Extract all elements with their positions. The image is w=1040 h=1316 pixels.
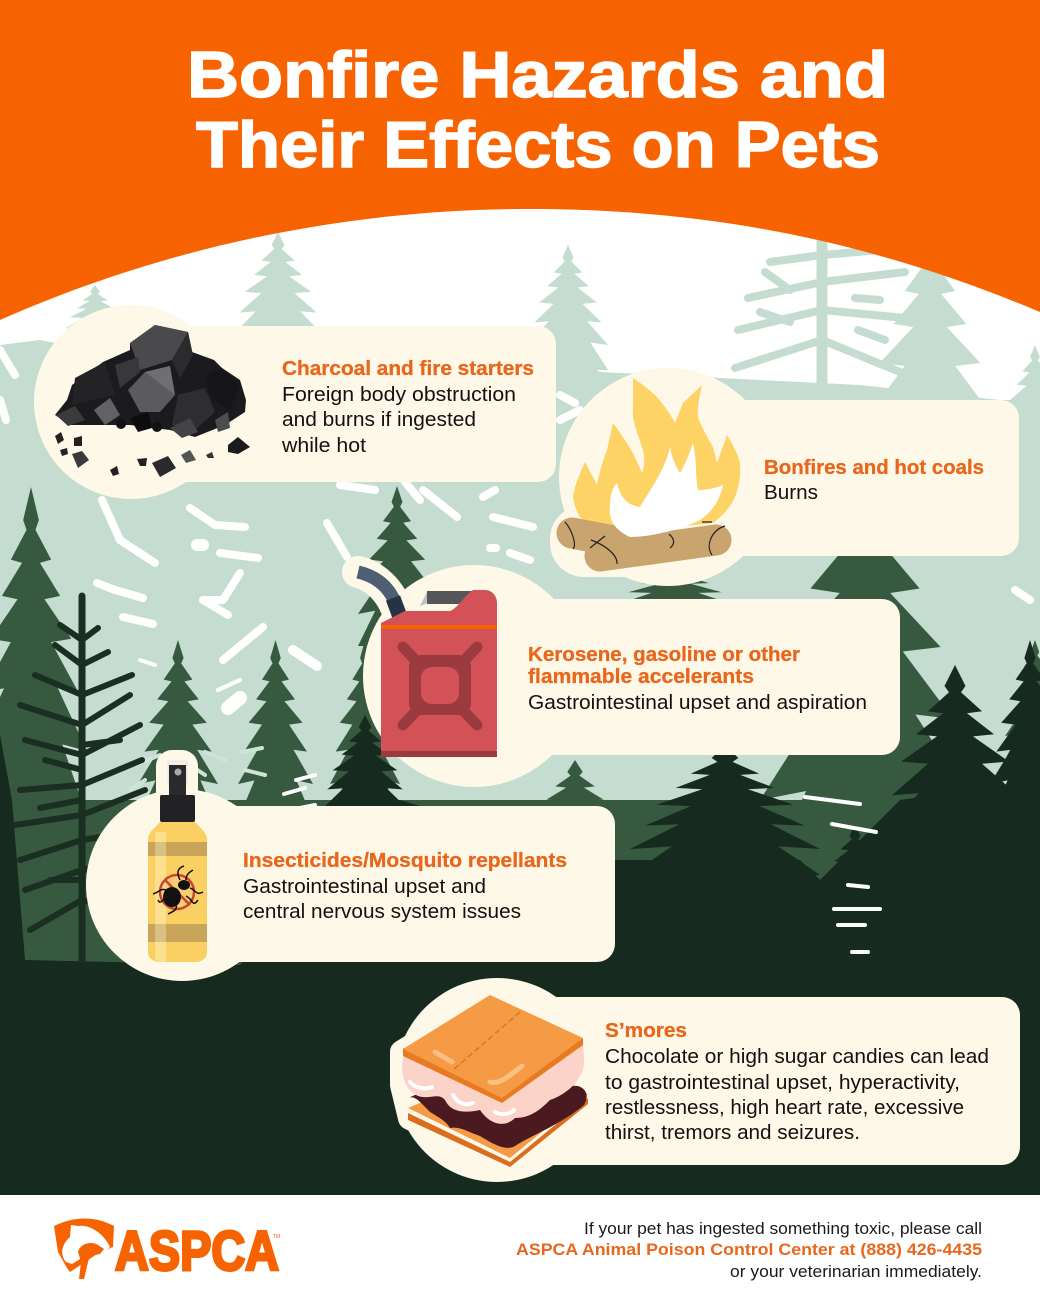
title — [187, 38, 888, 181]
text: insecticide effects: central nervous system issues — [243, 901, 521, 923]
text: charcoal effects — [281, 384, 516, 457]
text: s'mores effects: to gastrointestinal upset, hyperactivity, — [605, 1072, 960, 1094]
tree: branchy foreground conifer — [15, 596, 145, 960]
text: charcoal effects: and burns if ingested — [282, 409, 476, 431]
footer call to action — [516, 1219, 982, 1281]
heading: insecticides: Insecticides/Mosquito repellants — [243, 850, 567, 872]
trademark: TM — [273, 1234, 280, 1240]
card shape: insecticides — [86, 750, 615, 981]
panel: kerosene and accelerants — [358, 565, 900, 787]
icon: s'more — [402, 995, 588, 1167]
text: s'mores effects: Chocolate or high sugar candies can lead — [605, 1046, 989, 1068]
footer band — [0, 1195, 1040, 1316]
wordmark: ASPCA — [115, 1219, 279, 1282]
title: Bonfire Hazards and — [187, 38, 888, 111]
card shape: s'mores — [395, 978, 1020, 1182]
logo: ASPCA — [54, 1218, 280, 1282]
text: insecticide effects — [243, 876, 521, 923]
card shape: kerosene — [363, 565, 900, 787]
heading: charcoal: Charcoal and fire starters — [282, 358, 534, 380]
background: snow flecks on mid forest — [140, 660, 1018, 840]
icon: horse and dog shield — [54, 1218, 114, 1279]
panel: s'mores — [395, 978, 1020, 1182]
panel: insecticides and mosquito repellants — [86, 750, 615, 981]
text: s'mores effects: thirst, tremors and seizures. — [605, 1122, 860, 1144]
panel: bonfires and hot coals — [550, 368, 1019, 586]
heading: kerosene — [528, 644, 800, 688]
icon: charcoal pile — [55, 325, 250, 477]
orange header band — [0, 0, 1040, 320]
title: Their Effects on Pets — [196, 108, 880, 181]
background: mid green forest — [0, 440, 1040, 1200]
background: snow flecks on pale forest — [0, 350, 1030, 708]
heading: kerosene: flammable accelerants — [528, 666, 754, 688]
icon outline: spout — [358, 572, 398, 612]
text: kerosene effects: Gastrointestinal upset and aspiration — [528, 692, 867, 714]
heading: s'mores: S’mores — [605, 1020, 687, 1042]
card shape: bonfire — [550, 368, 1019, 586]
heading: kerosene: Kerosene, gasoline or other — [528, 644, 800, 666]
background: pale distant forest — [0, 225, 1040, 1000]
card shape: charcoal — [34, 305, 556, 499]
heading: bonfire: Bonfires and hot coals — [764, 457, 984, 479]
icon: campfire — [565, 378, 740, 564]
footer call to action: ASPCA Animal Poison Control Center at (888) 426-4435 — [516, 1240, 982, 1259]
text: insecticide effects: Gastrointestinal upset and — [243, 876, 486, 898]
footer call to action: or your veterinarian immediately. — [730, 1262, 982, 1281]
panel: charcoal and fire starters — [34, 305, 556, 499]
text: s'mores effects — [605, 1046, 989, 1144]
text: s'mores effects: restlessness, high heart rate, excessive — [605, 1097, 964, 1119]
icon: spray bottle — [148, 761, 207, 962]
text: bonfire effects: Burns — [764, 482, 818, 504]
icon: fuel can — [358, 572, 497, 757]
footer call to action: If your pet has ingested something toxic, please call — [584, 1219, 982, 1238]
text: charcoal effects: while hot — [281, 435, 366, 457]
background: dark foreground forest — [0, 640, 1040, 1200]
text: charcoal effects: Foreign body obstruction — [282, 384, 516, 406]
background: snow and mid accents in dark forest — [805, 797, 880, 952]
